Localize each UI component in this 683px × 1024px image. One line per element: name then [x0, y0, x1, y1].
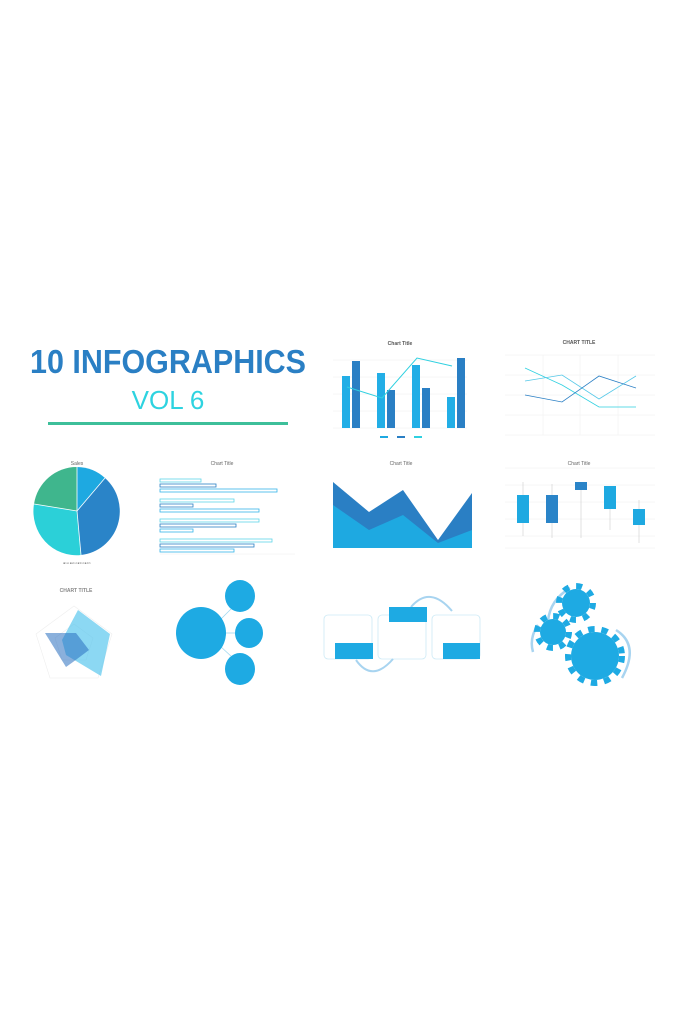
panel: pie chart: Sales	[71, 461, 84, 467]
subtitle: VOL 6	[132, 385, 204, 415]
panel: horizontal bar chart	[160, 461, 295, 554]
panel: area chart: Chart Title	[390, 461, 413, 467]
panel: flow diagram	[324, 597, 480, 671]
panel: candlestick chart	[505, 461, 655, 548]
panel: pie chart	[33, 461, 120, 565]
title: 10 INFOGRAPHICS	[30, 343, 306, 380]
panel: line chart: CHART TITLE	[563, 340, 596, 346]
panel: gears	[532, 586, 630, 683]
panel: candlestick chart: Chart Title	[568, 461, 591, 467]
panel: area chart	[333, 461, 472, 548]
panel: bubble diagram	[176, 580, 263, 685]
divider line	[48, 422, 288, 425]
panel: bar-line chart	[333, 341, 467, 438]
panel: line chart	[505, 340, 655, 435]
panel: radar chart	[36, 588, 112, 678]
panel: horizontal bar chart: Chart Title	[211, 461, 234, 467]
panel: bar-line chart: Chart Title	[388, 341, 413, 347]
panel: pie chart: ■1st ■2nd ■3rd ■4th	[63, 561, 91, 565]
panel: radar chart: CHART TITLE	[60, 588, 93, 594]
